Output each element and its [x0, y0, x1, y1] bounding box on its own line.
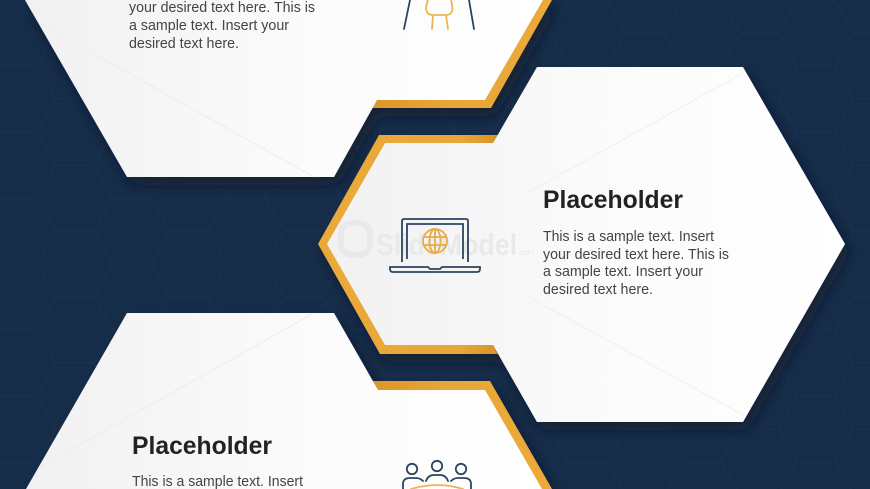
text block: top hexagon body: desired text here. — [129, 36, 239, 52]
text block: centre-right hexagon body: your desired text here. This is — [543, 247, 729, 263]
watermark: .com — [517, 248, 535, 257]
panel: centre-right hexagon — [318, 67, 845, 422]
text block: centre-right hexagon body: a sample text. Insert your — [543, 264, 703, 280]
heading: centre-right hexagon: Placeholder — [543, 186, 683, 214]
text block: centre-right hexagon body: desired text here. — [543, 282, 653, 298]
hexagon shape with gold border — [25, 0, 552, 177]
text block: centre-right hexagon body: This is a sample text. Insert — [543, 229, 714, 245]
icon: laptop with globe — [390, 219, 480, 272]
hexagon shape with gold border — [26, 313, 552, 489]
hexagon shape with gold border — [318, 67, 845, 422]
text block: top hexagon body: a sample text. Insert your — [129, 18, 289, 34]
watermark: SlideModel — [376, 227, 517, 262]
text block: top hexagon body: your desired text here. This is — [129, 0, 315, 16]
heading: bottom hexagon: Placeholder — [132, 432, 272, 460]
panel: bottom hexagon — [26, 313, 552, 489]
icon: team around a table — [403, 461, 471, 489]
panel: top hexagon — [25, 0, 552, 177]
icon: chair with lamp lines — [404, 0, 474, 29]
